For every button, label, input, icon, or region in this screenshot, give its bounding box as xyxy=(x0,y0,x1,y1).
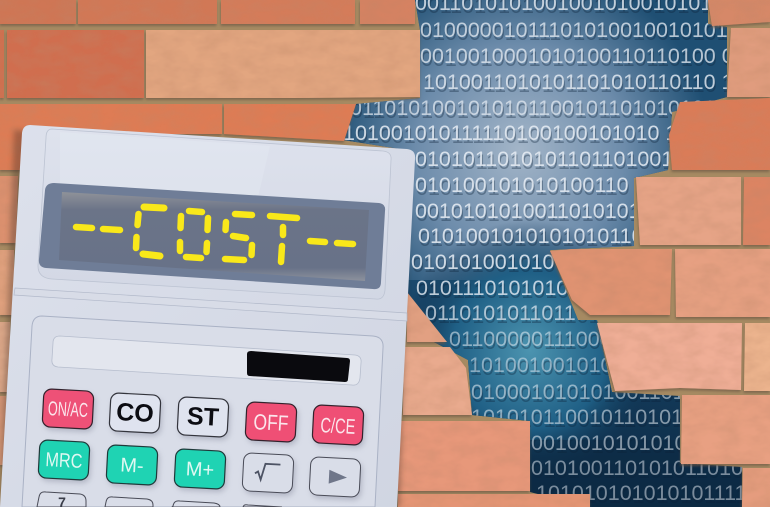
binary digit shadows: 010101001010 xyxy=(412,253,556,277)
keypad panel xyxy=(22,316,383,507)
solar cell xyxy=(247,351,350,382)
display bezel xyxy=(39,183,385,289)
binary digits: 101001001010100 xyxy=(469,353,648,377)
binary digit shadows: 101001001010100 xyxy=(470,356,649,380)
binary digits: 0010010101010100 xyxy=(531,431,722,455)
binary digit shadows: 01000101010100110110 xyxy=(472,383,708,407)
button: M-: M- xyxy=(120,454,144,478)
bricks: upper left wall xyxy=(0,0,420,465)
hole in wall with binary data xyxy=(340,0,770,507)
binary digit shadows: 10101011001011010101 xyxy=(472,408,708,432)
bottom row buttons xyxy=(37,492,282,507)
solar strip xyxy=(52,336,361,385)
button: OFF xyxy=(245,402,299,445)
binary digits: 010100101010100110 1 xyxy=(415,173,647,197)
button: ST: ST xyxy=(186,402,220,432)
binary digits: 10101011001011010101 xyxy=(471,405,707,429)
button: C/CE xyxy=(312,405,366,448)
cover glare xyxy=(60,132,270,274)
button: square root xyxy=(242,453,296,496)
binary digit shadows: 101001010111110100100101010 1 xyxy=(344,124,678,148)
binary digits xyxy=(343,0,770,505)
binary digits: 010101001010 xyxy=(411,250,555,274)
button: OFF: OFF xyxy=(253,409,289,436)
button: ST xyxy=(177,397,231,440)
binary digit shadows: 011000001110000 xyxy=(450,330,625,354)
binary digits: 01010010101010101101 xyxy=(418,224,656,248)
calculator shadow xyxy=(0,130,410,507)
display cover xyxy=(38,129,391,299)
button: ON/AC: ON/AC xyxy=(47,398,88,422)
binary digits: 01000001011101010010010101010 xyxy=(420,18,764,42)
binary digit shadows: 0101011010101101101001 xyxy=(416,150,674,174)
binary digits: 00101010100110101011 xyxy=(415,199,651,223)
binary digit shadows: 1010011010101101010110110 1 xyxy=(424,73,734,97)
button: C/CE: C/CE xyxy=(320,414,356,439)
button: M+ xyxy=(174,449,228,492)
button: M- xyxy=(106,445,160,488)
binary digit shadows: 01010010101010101101 xyxy=(419,227,657,251)
binary digits: 1010101010101011110 xyxy=(536,481,758,505)
binary digits: 0110101001010101100101101010101 xyxy=(350,96,716,120)
calculator body xyxy=(0,125,415,507)
binary digit shadows: 0110101001010101100101101010101 xyxy=(351,99,717,123)
binary digits: 0110101011011010 1 xyxy=(425,301,629,325)
binary digit shadows: 010100101010100110 1 xyxy=(416,176,648,200)
hinge line xyxy=(14,288,407,321)
binary digits: 1010011010101101010110110 1 xyxy=(423,70,733,94)
calculator xyxy=(0,125,415,507)
binary digit shadows: 01011101010101 xyxy=(417,279,581,303)
button: CO xyxy=(109,393,163,436)
binary digit shadows: 00101010100110101011 xyxy=(416,202,652,226)
binary digits: 01000101010100110110 xyxy=(471,380,707,404)
bricks: lower centre wall xyxy=(398,292,590,507)
binary digits: 01011101010101 xyxy=(416,276,580,300)
LCD text: --COST-- xyxy=(76,207,353,262)
binary digits: 101001010111110100100101010 1 xyxy=(343,121,677,145)
button: CO: CO xyxy=(116,398,154,428)
button: MRC xyxy=(38,440,92,483)
binary digits: 011000001110000 xyxy=(449,327,624,351)
binary digit shadows: 0010010001010100110110100 0 xyxy=(421,47,735,71)
binary digit shadows: 01000001011101010010010101010 xyxy=(421,21,765,45)
binary digit shadows xyxy=(347,0,727,452)
binary digit shadows: 0110101011011010 1 xyxy=(426,304,630,328)
binary digits: 0010010001010100110110100 0 xyxy=(420,44,734,68)
binary digits: 0101011010101101101001 xyxy=(415,147,673,171)
button: MRC: MRC xyxy=(45,449,83,473)
button: play xyxy=(309,457,363,500)
LCD panel xyxy=(59,192,369,281)
button: M+: M+ xyxy=(185,458,215,482)
button: ON/AC xyxy=(42,389,96,432)
bricks: right wall xyxy=(550,0,770,507)
binary digit shadows: 0010010101010100 xyxy=(532,434,723,458)
